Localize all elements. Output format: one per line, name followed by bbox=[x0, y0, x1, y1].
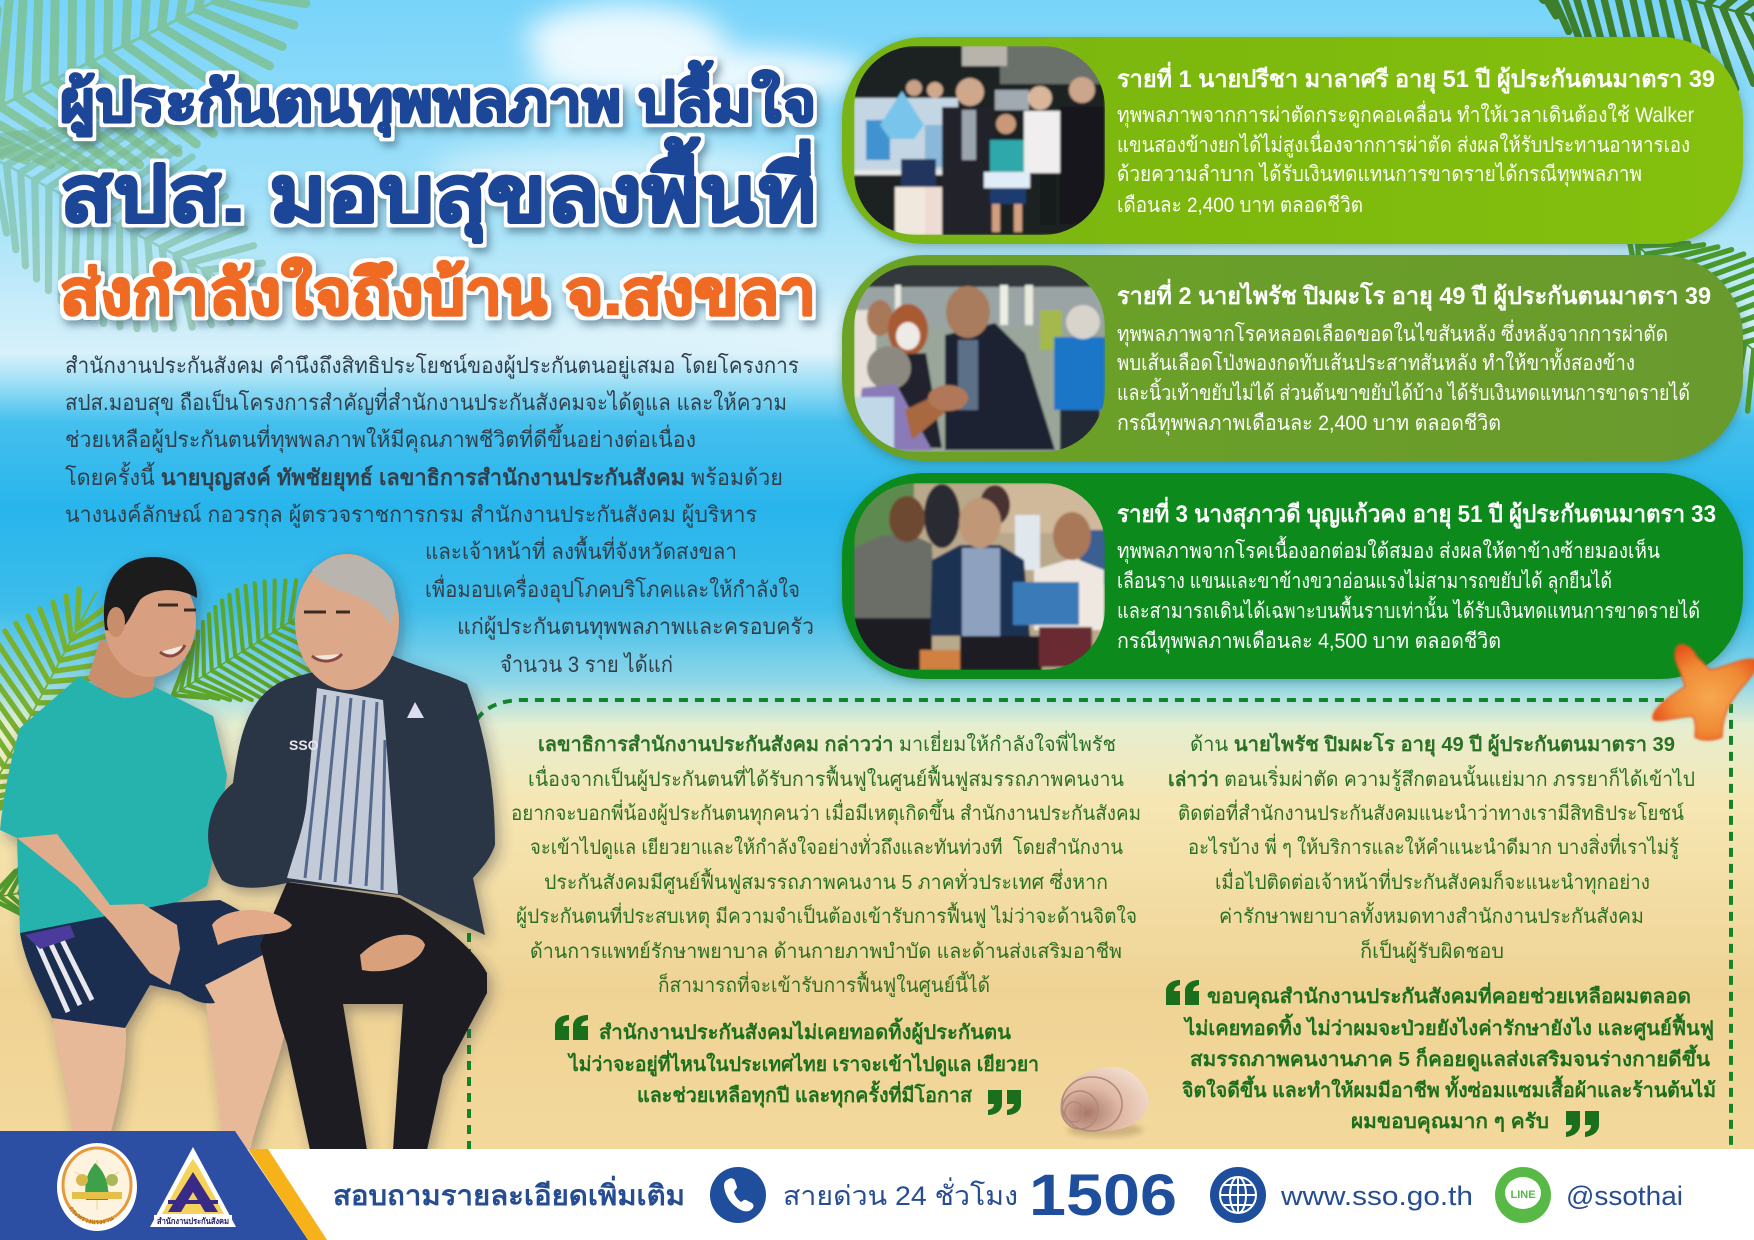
description: ทุพพลภาพจากโรคเนื้องอกต่อมใต้สมอง ส่งผลให้ตาข้างซ้ายมองเห็น bbox=[1117, 536, 1660, 564]
description bbox=[1117, 319, 1690, 436]
contact label: สอบถามรายละเอียดเพิ่มเติม bbox=[333, 1175, 685, 1211]
description: ทุพพลภาพจากโรคหลอดเลือดขอดในไขสันหลัง ซึ่งหลังจากการผ่าตัด bbox=[1117, 319, 1668, 347]
photo: case 1 group bbox=[854, 46, 1105, 235]
quote: จิตใจดีขึ้น และทำให้ผมมีอาชีพ ทั้งซ่อมแซมเสื้อผ้าและร้านต้นไม้ bbox=[1182, 1075, 1716, 1102]
logo: ministry seal: กระทรวงแรงงาน bbox=[69, 1206, 114, 1224]
description: กรณีทุพพลภาพเดือนละ 4,500 บาท ตลอดชีวิต bbox=[1117, 630, 1501, 654]
quote: ไม่ว่าจะอยู่ที่ไหนในประเทศไทย เราจะเข้าไปดูแล เยียวยา bbox=[567, 1049, 1039, 1078]
description: แขนสองข้างยกได้ไม่สูงเนื่องจากการผ่าตัด ส่งผลให้รับประทานอาหารเอง bbox=[1117, 130, 1690, 158]
icon: closing quote bbox=[988, 1090, 1021, 1115]
frond top left bbox=[0, 0, 367, 258]
statement paragraph bbox=[1168, 732, 1695, 964]
neck and head bbox=[88, 640, 158, 698]
statement paragraph: เล่าว่า ตอนเริ่มผ่าตัด ความรู้สึกตอนนั้นแย่มาก ภรรยาก็ได้เข้าไป bbox=[1168, 765, 1695, 792]
footer bbox=[0, 1131, 1754, 1240]
statement paragraph: เมื่อไปติดต่อเจ้าหน้าที่ประกันสังคมก็จะแนะนำทุกอย่าง bbox=[1215, 868, 1650, 895]
palm fronds: background foliage bbox=[0, 0, 1754, 959]
title line 3: ส่งกำลังใจถึงบ้าน จ.สงขลา bbox=[60, 257, 816, 328]
striped shirt bbox=[287, 688, 398, 894]
frond left side bbox=[0, 558, 160, 864]
photo: case 2 group bbox=[854, 265, 1105, 452]
jacket bbox=[208, 656, 495, 935]
panel: case 1 bbox=[842, 37, 1743, 244]
statement paragraph: ก็สามารถที่จะเข้ารับการฟื้นฟูในศูนย์นี้ได้ bbox=[658, 971, 990, 998]
pill background bbox=[842, 473, 1743, 679]
quote: สมรรถภาพคนงานภาค 5 ก็คอยดูแลส่งเสริมจนร่างกายดีขึ้น bbox=[1190, 1044, 1710, 1073]
quote bbox=[1166, 980, 1716, 1137]
statement paragraph bbox=[511, 730, 1141, 998]
logo: social security office: สำนักงานประกันสังคม bbox=[157, 1216, 229, 1226]
blue logo panel bbox=[0, 1131, 308, 1240]
intro text block: ช่วยเหลือผู้ประกันตนที่ทุพพลภาพให้มีคุณภาพชีวิตที่ดีขึ้นอย่างต่อเนื่อง bbox=[65, 424, 696, 453]
panel: case 3 bbox=[842, 473, 1743, 679]
frond top right bbox=[1467, 0, 1754, 130]
quote: ไม่เคยทอดทิ้ง ไม่ว่าผมจะป่วยยังไงค่ารักษายังไง และศูนย์ฟื้นฟู bbox=[1183, 1013, 1714, 1042]
intro text block: สำนักงานประกันสังคม คำนึงถึงสิทธิประโยชน์ของผู้ประกันตนอยู่เสมอ โดยโครงการ bbox=[65, 353, 799, 379]
text column: insured person statement bbox=[1166, 732, 1716, 1137]
statement paragraph: จะเข้าไปดูแล เยียวยาและให้กำลังใจอย่างทั่วถึงและทันท่วงที โดยสำนักงาน bbox=[530, 833, 1123, 860]
statement paragraph: ด้านการแพทย์รักษาพยาบาล ด้านกายภาพบำบัด และด้านส่งเสริมอาชีพ bbox=[530, 940, 1122, 963]
logo: social security office bbox=[150, 1147, 236, 1227]
white footer band bbox=[0, 1149, 1754, 1240]
icon: line: LINE bbox=[1510, 1189, 1536, 1201]
statement paragraph: ติดต่อที่สำนักงานประกันสังคมแนะนำว่าทางเรามีสิทธิประโยชน์ bbox=[1178, 799, 1684, 825]
panel: case 2 bbox=[842, 255, 1743, 461]
website: www.sso.go.th bbox=[1280, 1181, 1473, 1211]
intro text block: เพื่อมอบเครื่องอุปโภคบริโภคและให้กำลังใจ bbox=[425, 574, 800, 603]
icon: line bbox=[1495, 1167, 1551, 1223]
intro text block bbox=[65, 353, 814, 677]
title line 2: สปส. มอบสุขลงพื้นที่ bbox=[60, 137, 816, 243]
logo: ministry seal bbox=[57, 1143, 137, 1231]
icon: opening quote bbox=[555, 1015, 588, 1040]
clouds bbox=[430, 4, 1754, 352]
intro text block: แก่ผู้ประกันตนทุพพลภาพและครอบครัว bbox=[457, 614, 814, 640]
trousers bbox=[260, 882, 487, 1150]
quote: ขอบคุณสำนักงานประกันสังคมที่คอยช่วยเหลือผมตลอด bbox=[1207, 981, 1691, 1009]
description bbox=[1117, 536, 1700, 654]
icon: opening quote bbox=[1166, 980, 1199, 1005]
description: กรณีทุพพลภาพเดือนละ 2,400 บาท ตลอดชีวิต bbox=[1117, 412, 1501, 436]
description: ด้วยความลำบาก ได้รับเงินทดแทนการขาดรายได้กรณีทุพพลภาพ bbox=[1117, 162, 1642, 187]
statement paragraph: ประกันสังคมมีศูนย์ฟื้นฟูสมรรถภาพคนงาน 5 ภาคทั่วประเทศ ซึ่งหาก bbox=[544, 868, 1108, 895]
icon: seashell bbox=[1060, 1067, 1149, 1137]
quote bbox=[555, 1015, 1039, 1115]
title line 1: ผู้ประกันตนทุพพลภาพ ปลื้มใจ bbox=[60, 61, 816, 137]
dashed story box outline bbox=[469, 700, 1731, 1150]
hotline label: สายด่วน 24 ชั่วโมง bbox=[783, 1177, 1018, 1211]
legs bbox=[53, 988, 126, 1135]
icon: starfish bbox=[1653, 645, 1754, 740]
shorts bbox=[20, 900, 280, 1028]
statement paragraph: ค่ารักษาพยาบาลทั้งหมดทางสำนักงานประกันสังคม bbox=[1219, 902, 1644, 928]
figure: two seated men bbox=[0, 554, 495, 1150]
jacket monogram: SSO bbox=[289, 737, 319, 753]
frond right side bbox=[1572, 176, 1754, 464]
statement paragraph: อยากจะบอกพี่น้องผู้ประกันตนทุกคนว่า เมื่อมีเหตุเกิดขึ้น สำนักงานประกันสังคม bbox=[511, 799, 1141, 826]
frond left side lower bbox=[0, 802, 212, 959]
heading: รายที่ 3 นางสุภาวดี บุญแก้วคง อายุ 51 ปี ผู้ประกันตนมาตรา 33 bbox=[1117, 496, 1716, 530]
intro text block: สปส.มอบสุข ถือเป็นโครงการสำคัญที่สำนักงานประกันสังคมจะได้ดูแล และให้ความ bbox=[65, 387, 787, 416]
text column: secretary-general statement bbox=[511, 730, 1141, 1115]
statement paragraph: ก็เป็นผู้รับผิดชอบ bbox=[1360, 938, 1504, 964]
intro text block: จำนวน 3 ราย ได้แก่ bbox=[500, 652, 673, 677]
heading: รายที่ 2 นายไพรัช ปิมผะโร อายุ 49 ปี ผู้ประกันตนมาตรา 39 bbox=[1117, 278, 1711, 312]
description: เลือนราง แขนและขาข้างขวาอ่อนแรงไม่สามารถขยับได้ ลุกยืนได้ bbox=[1117, 569, 1612, 594]
man in teal shirt bbox=[0, 557, 292, 1150]
photo: case 3 group bbox=[854, 483, 1105, 670]
gold stripe bbox=[248, 1149, 327, 1240]
arm and hands bbox=[17, 834, 180, 985]
hotline number: 1506 bbox=[1029, 1163, 1177, 1228]
description: เดือนละ 2,400 บาท ตลอดชีวิต bbox=[1117, 194, 1363, 217]
title bbox=[60, 61, 816, 328]
heading: รายที่ 1 นายปรีชา มาลาศรี อายุ 51 ปี ผู้ประกันตนมาตรา 39 bbox=[1117, 61, 1715, 95]
frond behind people upper bbox=[136, 543, 370, 747]
quote: และช่วยเหลือทุกปี และทุกครั้งที่มีโอกาส bbox=[637, 1080, 973, 1108]
statement paragraph: ด้าน นายไพรัช ปิมผะโร อายุ 49 ปี ผู้ประกันตนมาตรา 39 bbox=[1190, 732, 1675, 758]
line handle: @ssothai bbox=[1566, 1181, 1683, 1211]
pill background bbox=[842, 255, 1743, 461]
statement paragraph: ผู้ประกันตนที่ประสบเหตุ มีความจำเป็นต้องเข้ารับการฟื้นฟู ไม่ว่าจะด้านจิตใจ bbox=[516, 902, 1137, 929]
description: ทุพพลภาพจากการผ่าตัดกระดูกคอเคลื่อน ทำให้เวลาเดินต้องใช้ Walker bbox=[1117, 100, 1694, 128]
description: พบเส้นเลือดโป่งพองกดทับเส้นประสาทสันหลัง ทำให้ขาทั้งสองข้าง bbox=[1117, 348, 1635, 375]
quote: ผมขอบคุณมาก ๆ ครับ bbox=[1351, 1111, 1549, 1134]
statement paragraph: เนื่องจากเป็นผู้ประกันตนที่ได้รับการฟื้นฟูในศูนย์ฟื้นฟูสมรรถภาพคนงาน bbox=[528, 765, 1124, 792]
jacket logo bbox=[407, 702, 424, 718]
intro text block: โดยครั้งนี้ นายบุญสงค์ ทัพชัยยุทธ์ เลขาธิการสำนักงานประกันสังคม พร้อมด้วย bbox=[65, 462, 783, 492]
hands bbox=[212, 910, 292, 945]
frond top left lower bbox=[0, 50, 313, 389]
icon: globe bbox=[1210, 1167, 1266, 1223]
man in dark jacket bbox=[208, 554, 495, 1150]
quote: สำนักงานประกันสังคมไม่เคยทอดทิ้งผู้ประกันตน bbox=[599, 1017, 1011, 1046]
icon: phone bbox=[710, 1167, 766, 1223]
intro text block: นางนงค์ลักษณ์ กอวรกุล ผู้ตรวจราชการกรม สำนักงานประกันสังคม ผู้บริหาร bbox=[65, 502, 757, 528]
icon: closing quote bbox=[1566, 1111, 1599, 1137]
pill background bbox=[842, 37, 1743, 244]
statement paragraph: เลขาธิการสำนักงานประกันสังคม กล่าวว่า มาเยี่ยมให้กำลังใจพี่ไพรัช bbox=[538, 730, 1116, 756]
description bbox=[1117, 100, 1694, 217]
intro text block: และเจ้าหน้าที่ ลงพื้นที่จังหวัดสงขลา bbox=[425, 536, 737, 564]
statement paragraph: อะไรบ้าง พี่ ๆ ให้บริการและให้คำแนะนำดีมาก บางสิ่งที่เราไม่รู้ bbox=[1188, 833, 1679, 860]
shirt bbox=[0, 676, 227, 933]
neck and head bbox=[295, 554, 399, 690]
